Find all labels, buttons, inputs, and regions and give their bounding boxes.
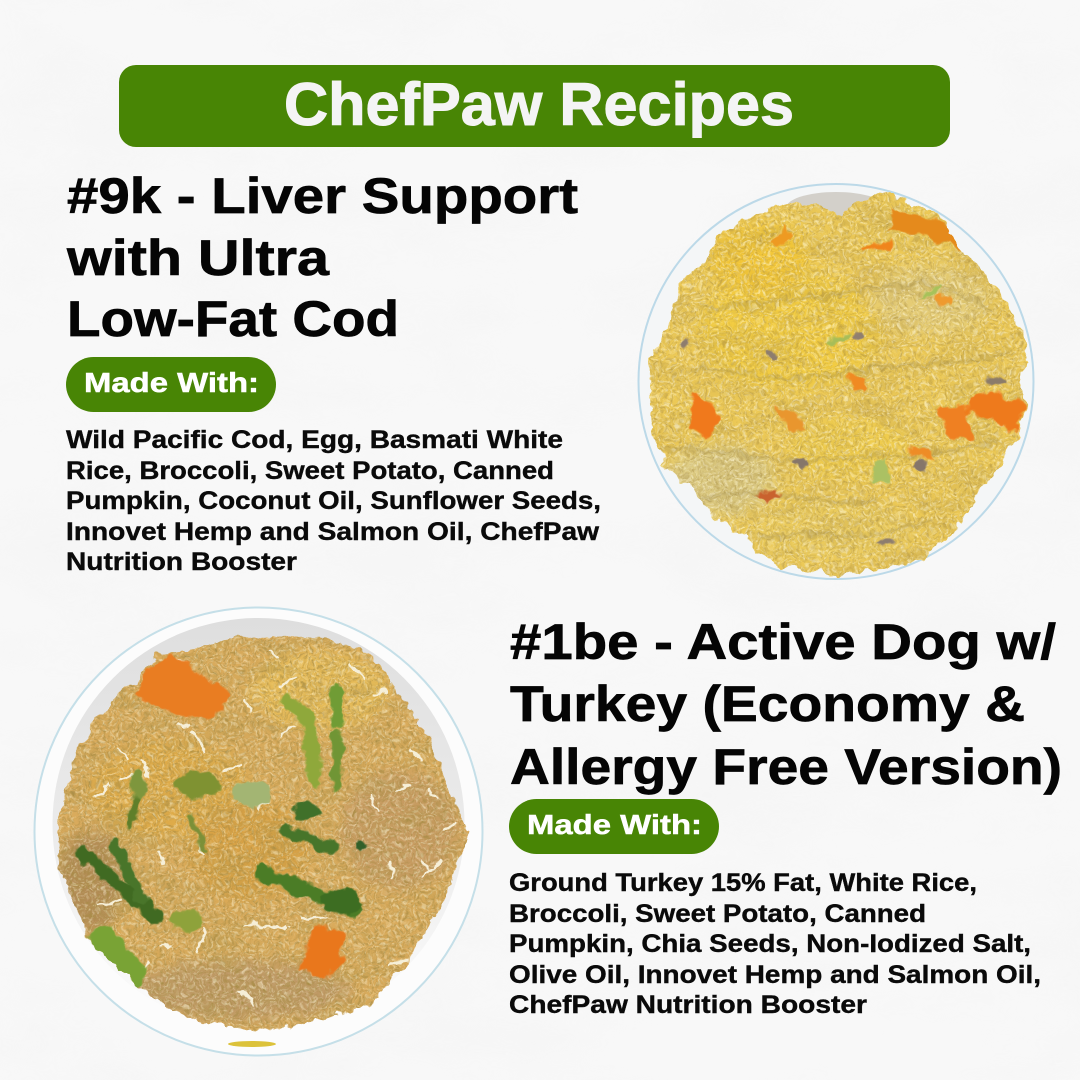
ingredients: recipe 1be: ChefPaw Nutrition Booster	[509, 991, 867, 1019]
ingredients: recipe 9k: Nutrition Booster	[66, 548, 297, 576]
ingredients: recipe 1be: Broccoli, Sweet Potato, Canned	[509, 900, 926, 928]
badge: made with: Made With:	[84, 367, 259, 398]
ingredients: recipe 9k: Pumpkin, Coconut Oil, Sunflower Seeds,	[66, 487, 601, 515]
orange pieces	[135, 652, 345, 978]
orange pieces	[690, 208, 1024, 503]
badge: made with	[509, 799, 719, 854]
title banner: ChefPaw Recipes	[284, 71, 794, 138]
photo: bowl of recipe 1be	[34, 608, 482, 1056]
badge: made with	[66, 357, 276, 412]
ingredients: recipe 1be: Olive Oil, Innovet Hemp and Salmon Oil,	[509, 961, 1041, 989]
ingredients: recipe 9k	[66, 426, 601, 576]
heading: recipe 1be	[510, 614, 1062, 795]
heading: recipe 9k: with Ultra	[66, 230, 330, 286]
green and seed flecks	[681, 285, 1007, 544]
photo: bowl of recipe 9k	[638, 184, 1040, 580]
creases between food clumps	[660, 284, 1010, 540]
heading: recipe 9k: #9k - Liver Support	[67, 168, 578, 224]
heading: recipe 1be: Turkey (Economy &	[510, 676, 1025, 732]
ingredients: recipe 1be: Pumpkin, Chia Seeds, Non-Iodized Salt,	[509, 930, 1031, 958]
ingredients: recipe 1be	[509, 869, 1041, 1019]
ingredients: recipe 1be: Ground Turkey 15% Fat, White Rice,	[509, 869, 977, 897]
heading: recipe 9k	[66, 168, 578, 347]
rice slivers	[95, 650, 455, 1005]
panel: recipe 1be	[509, 614, 1062, 1019]
ingredients: recipe 9k: Rice, Broccoli, Sweet Potato, Canned	[66, 457, 554, 485]
heading: recipe 1be: #1be - Active Dog w/	[510, 614, 1056, 670]
ingredients: recipe 9k: Wild Pacific Cod, Egg, Basmati White	[66, 426, 563, 454]
panel: recipe 9k	[66, 168, 601, 576]
ingredients: recipe 9k: Innovet Hemp and Salmon Oil, ChefPaw	[66, 518, 600, 546]
heading: recipe 1be: Allergy Free Version)	[510, 739, 1062, 795]
heading: recipe 9k: Low-Fat Cod	[67, 291, 399, 347]
title banner	[119, 65, 950, 147]
broccoli and green pieces	[82, 692, 368, 975]
badge: made with: Made With:	[527, 809, 702, 840]
